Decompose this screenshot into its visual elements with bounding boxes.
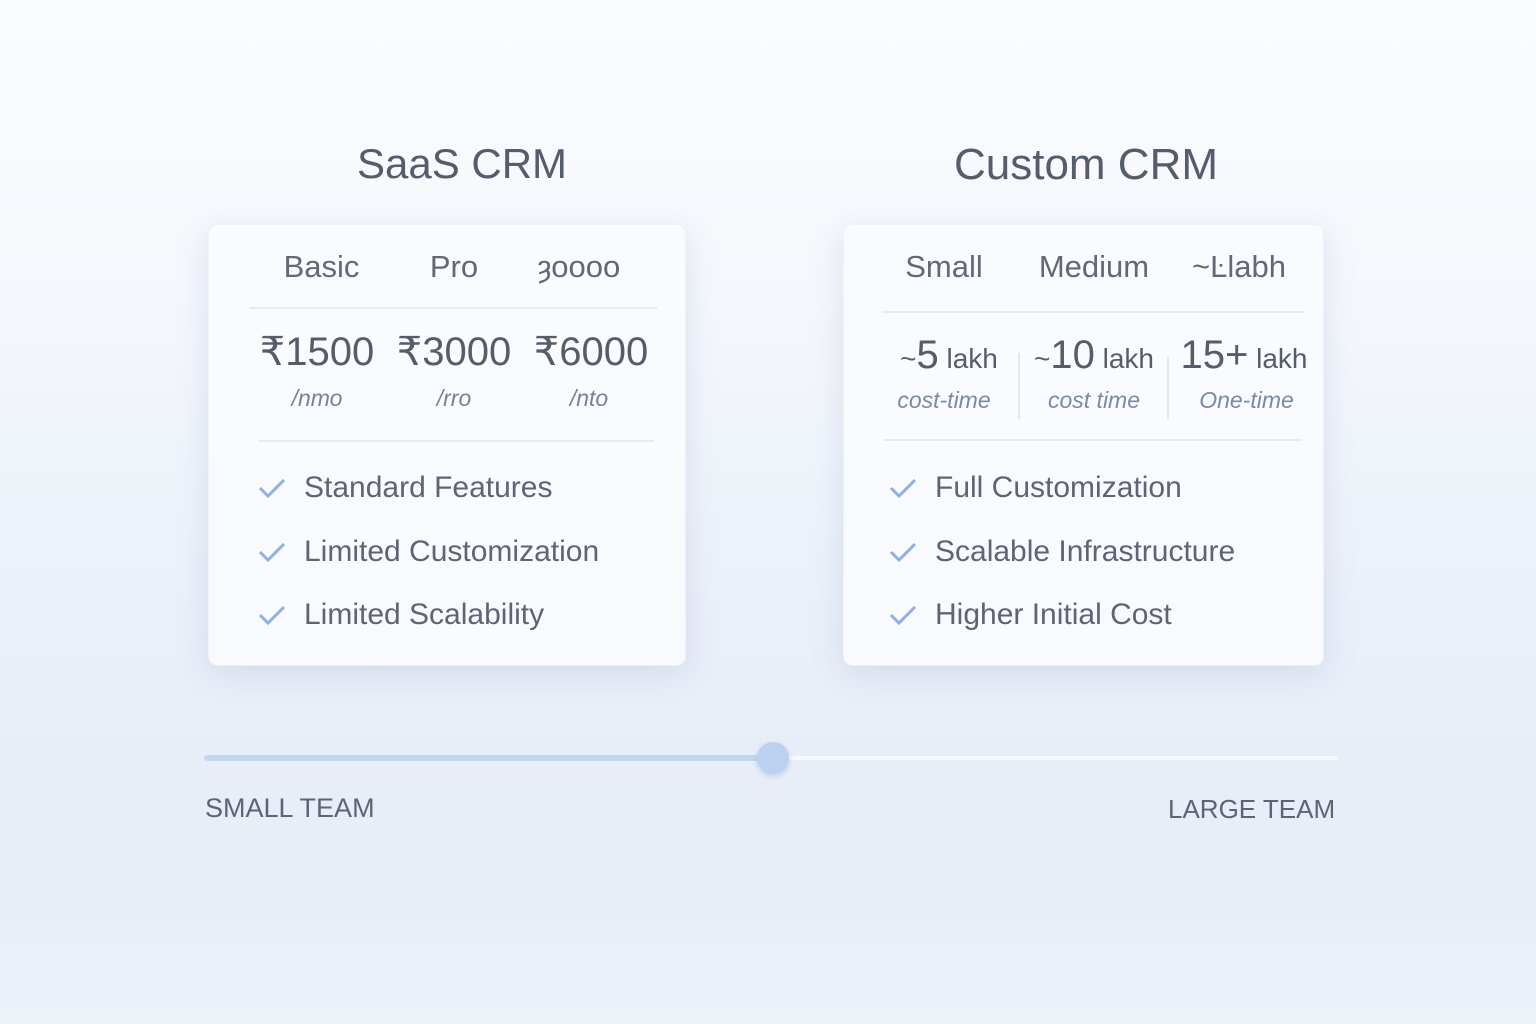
cost subtitles: One-time	[1199, 387, 1294, 413]
feature: Limited Scalability: Limited Scalability	[304, 598, 544, 631]
cost values: ~10 lakh	[1034, 333, 1154, 377]
size headings	[905, 249, 1286, 284]
prices	[260, 330, 648, 374]
title: Custom CRM: Custom CRM	[954, 140, 1218, 189]
size headings: Small	[905, 249, 983, 284]
size headings: Medium	[1039, 249, 1149, 284]
tier headings	[284, 249, 620, 284]
tier headings: Basic	[284, 249, 359, 284]
panel: Custom CRM	[843, 224, 1324, 666]
size headings: ~Ŀlabh	[1192, 249, 1286, 284]
slider	[204, 742, 1338, 778]
prices: ₹6000	[534, 330, 648, 374]
feature: Full Customization: Full Customization	[935, 471, 1182, 504]
cost subtitles	[897, 387, 1294, 413]
period labels: /nto	[570, 385, 608, 411]
cost values: 15+ lakh	[1180, 333, 1308, 377]
period labels	[290, 385, 608, 411]
feature: Higher Initial Cost: Higher Initial Cost	[935, 598, 1172, 631]
period labels: /rro	[437, 385, 471, 411]
cost subtitles: cost-time	[897, 387, 991, 413]
prices: ₹1500	[260, 330, 374, 374]
slider knob	[757, 742, 789, 774]
feature: Limited Customization: Limited Customization	[304, 535, 599, 568]
prices: ₹3000	[397, 330, 511, 374]
panel: SaaS CRM	[208, 224, 686, 666]
tier headings: Pro	[430, 249, 478, 284]
feature: Scalable Infrastructure: Scalable Infrastructure	[935, 535, 1235, 568]
title: SaaS CRM: SaaS CRM	[357, 140, 567, 187]
period labels: /nто	[292, 385, 342, 411]
cost values	[900, 333, 1308, 377]
label: small team: SMALL TEAM	[205, 793, 375, 823]
tier headings: ȝoooo	[538, 249, 620, 284]
cost values: ~5 lakh	[900, 333, 998, 377]
label: large team: LARGE TEAM	[1168, 794, 1335, 824]
cost subtitles: cost time	[1048, 387, 1140, 413]
feature: Standard Features: Standard Features	[304, 471, 552, 504]
